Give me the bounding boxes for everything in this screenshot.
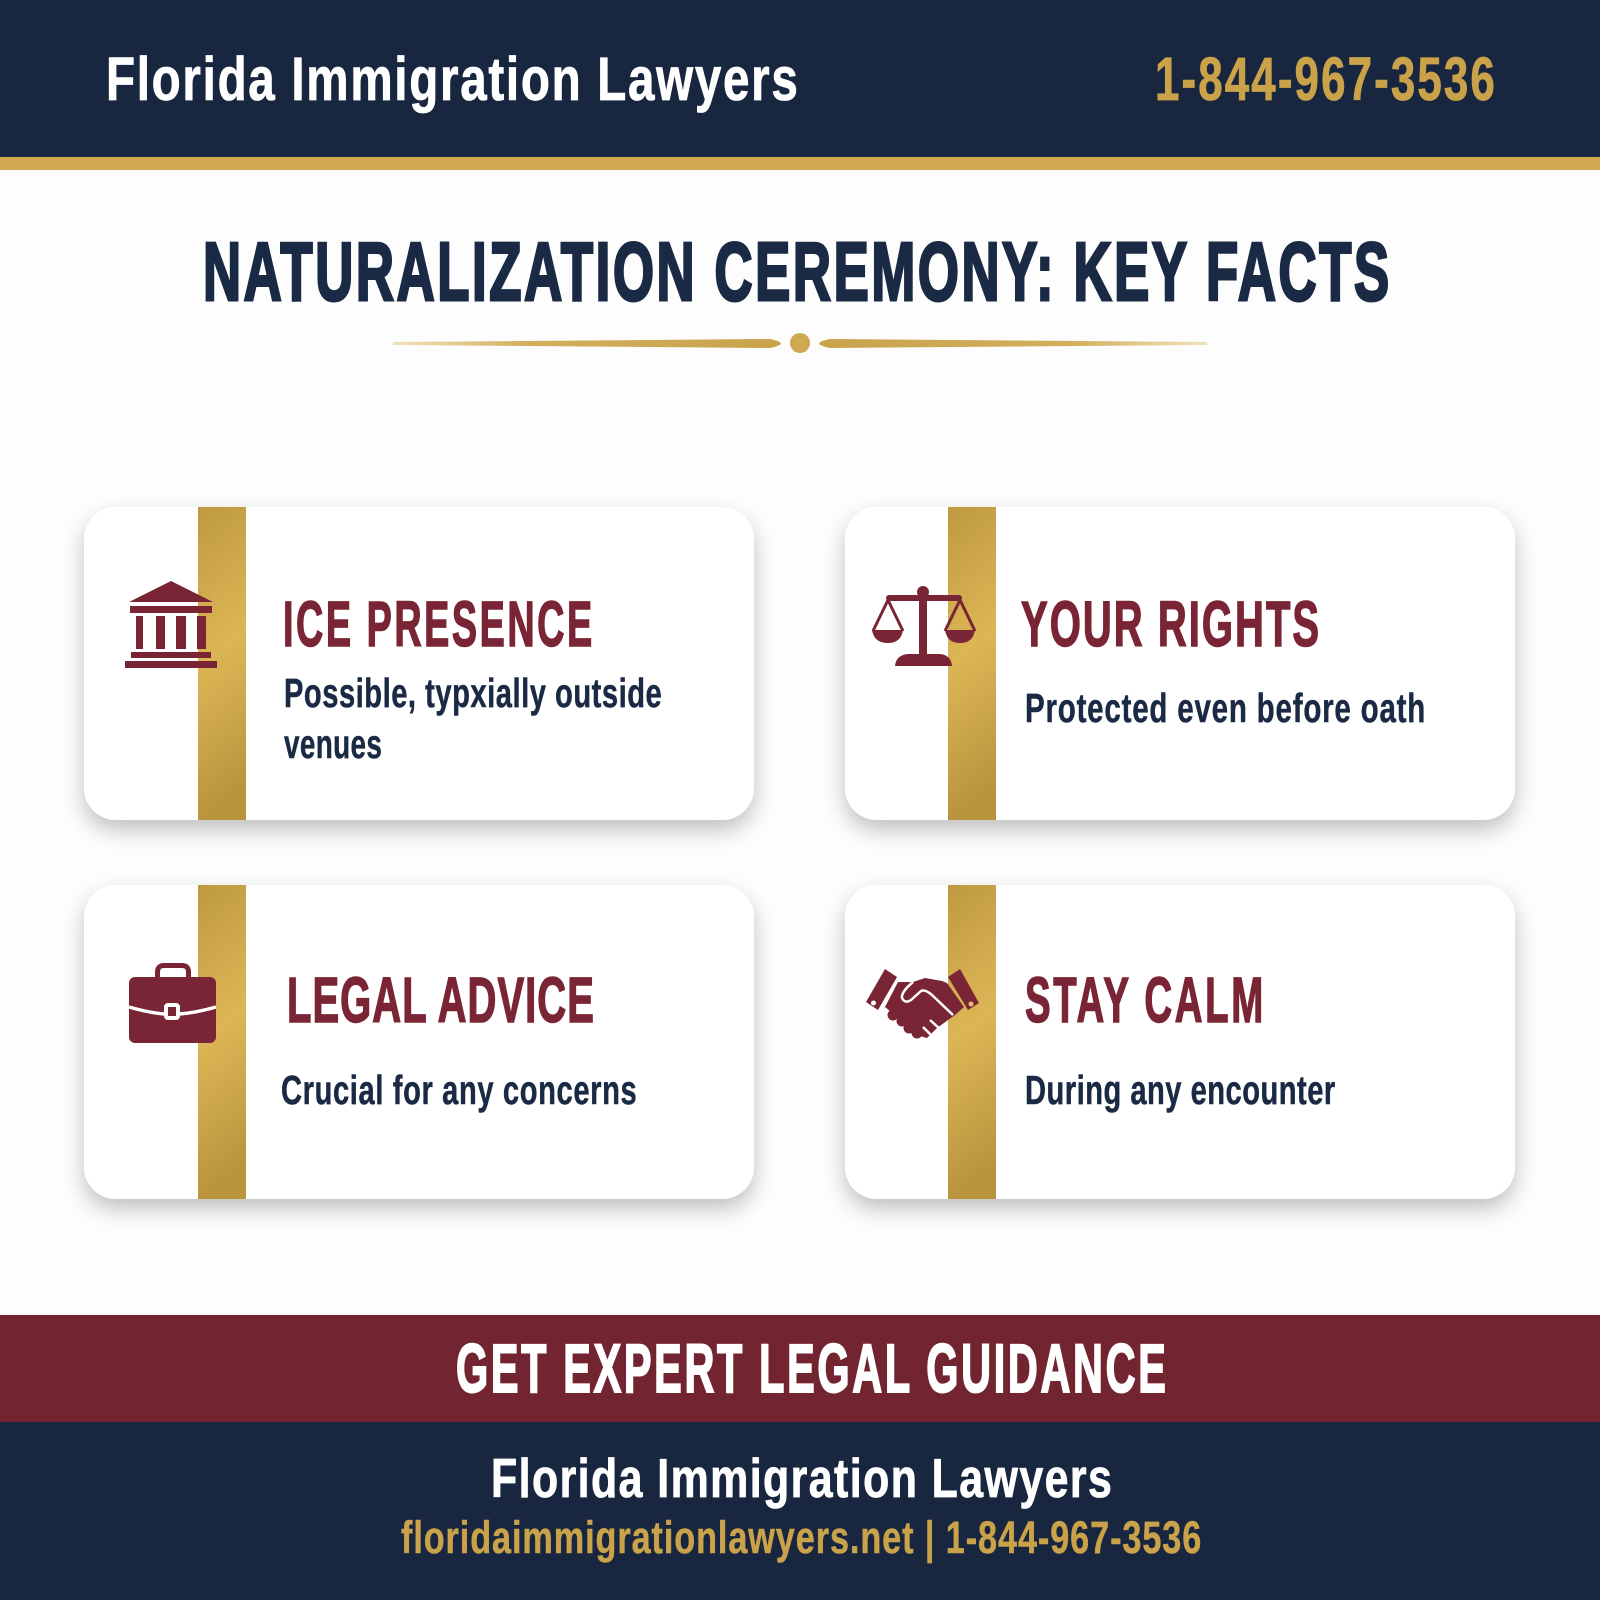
page background	[0, 170, 1600, 1315]
icon: briefcase	[129, 966, 216, 1043]
footer firm name: Florida Immigration Lawyers	[491, 1448, 1112, 1509]
body text: Possible, typxially outside	[284, 670, 662, 716]
header phone number: 1-844-967-3536	[1155, 46, 1495, 114]
body text: During any encounter	[1025, 1067, 1335, 1113]
heading: LEGAL ADVICE	[287, 966, 594, 1036]
panel: ICE presence	[84, 507, 754, 820]
icon: courthouse	[125, 581, 217, 668]
header bar	[0, 0, 1600, 170]
panel: your rights	[845, 507, 1515, 820]
main title: NATURALIZATION CEREMONY: KEY FACTS	[203, 225, 1389, 318]
call to action banner	[0, 1315, 1600, 1422]
panel: legal advice	[84, 885, 754, 1199]
icon: scales of justice	[872, 586, 975, 666]
footer	[0, 1422, 1600, 1600]
title ornament divider	[393, 333, 1207, 353]
footer website and phone: floridaimmigrationlawyers.net | 1-844-967-3536	[401, 1514, 1201, 1563]
icon: handshake	[866, 969, 979, 1038]
heading: ICE PRESENCE	[283, 589, 592, 661]
body text: Crucial for any concerns	[281, 1067, 637, 1113]
heading: STAY CALM	[1025, 965, 1263, 1037]
call to action banner: GET EXPERT LEGAL GUIDANCE	[456, 1330, 1166, 1408]
heading: YOUR RIGHTS	[1021, 590, 1319, 660]
body text	[284, 670, 662, 767]
header firm name: Florida Immigration Lawyers	[106, 44, 798, 113]
body text: venues	[284, 722, 382, 767]
panel: stay calm	[845, 885, 1515, 1199]
body text: Protected even before oath	[1025, 685, 1425, 731]
